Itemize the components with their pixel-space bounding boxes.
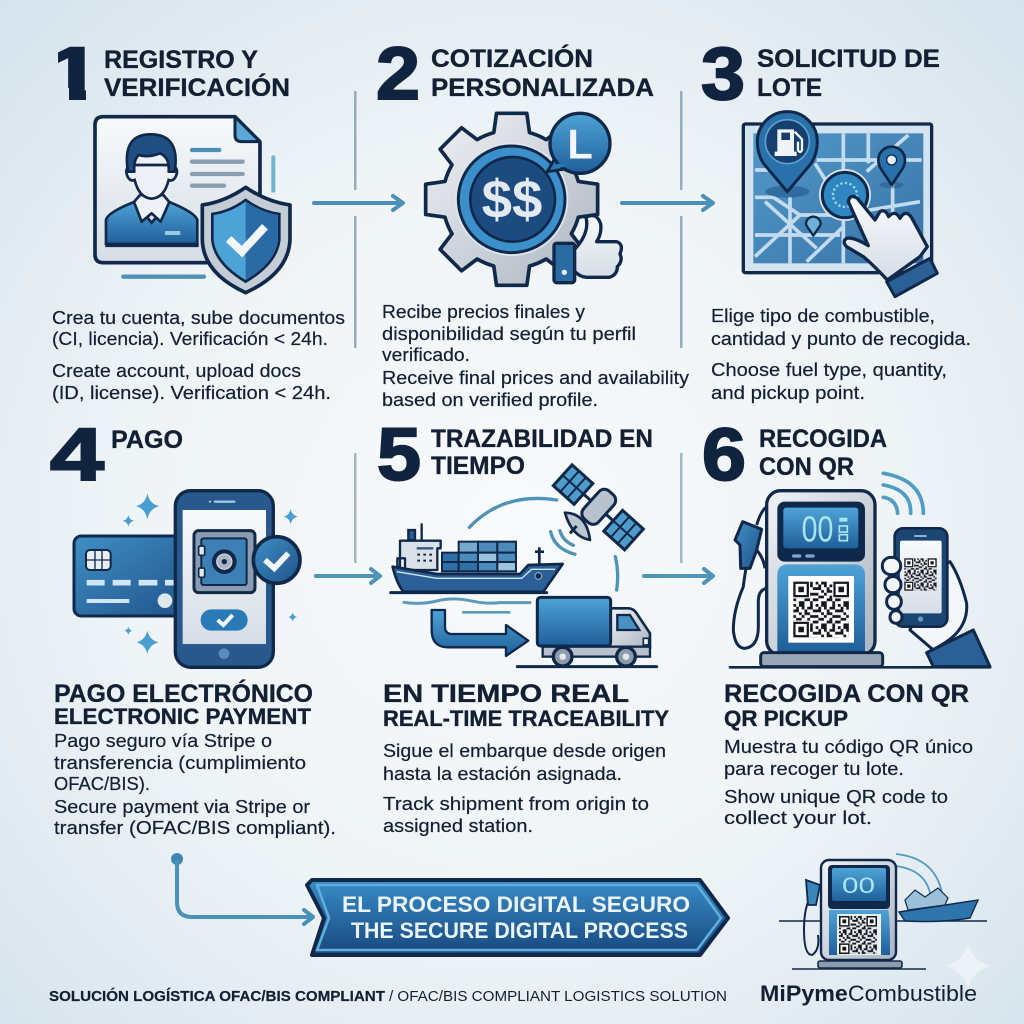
arrow: step 1 to 2 (314, 196, 403, 210)
heading: solicitud: LOTE (757, 74, 822, 102)
body text step 1: (ID, license). Verification < 24h. (52, 382, 331, 403)
body text step 6: collect your lot. (724, 807, 872, 828)
panel: step 6 (702, 413, 990, 828)
heading: en tiempo real: REAL-TIME TRACEABILITY (383, 706, 669, 731)
heading: registro: REGISTRO Y (104, 46, 258, 74)
icon: ship truck satellite (391, 461, 657, 667)
heading: trazabilidad: TIEMPO (431, 452, 525, 480)
body text step 1 (52, 307, 345, 403)
number 3: 3 (701, 32, 745, 115)
body text step 5: Track shipment from origin to (383, 793, 649, 814)
body text step 3: Choose fuel type, quantity, (711, 359, 947, 380)
heading: cotizacion: PERSONALIZADA (431, 74, 654, 102)
panel: step 4 (50, 413, 336, 838)
body text step 4: transferencia (cumplimiento (54, 752, 306, 773)
arrow: step 2 to 3 (622, 196, 713, 210)
body text step 4 (54, 730, 336, 838)
body text step 3: and pickup point. (711, 382, 865, 403)
heading: registro (104, 46, 290, 102)
body text step 2: Receive final prices and availability (382, 367, 690, 388)
icon: map with pin and hand (743, 112, 937, 297)
body text step 6: Show unique QR code to (724, 786, 948, 807)
icon: gear with dollars: $$ (482, 171, 542, 230)
heading: recogida con qr: QR PICKUP (724, 706, 848, 731)
icon: fuel pump and phone QR (730, 473, 990, 667)
body text step 4: transfer (OFAC/BIS compliant). (54, 817, 336, 838)
number 4: 4 (50, 413, 104, 496)
arrow: step 5 to 6 (644, 569, 713, 583)
banner (307, 880, 728, 955)
footer tagline (49, 987, 727, 1005)
body text step 5: Sigue el embarque desde origen (383, 740, 666, 761)
body text step 3: cantidad y punto de recogida. (711, 328, 971, 349)
body text step 2: disponibilidad según tu perfil (382, 323, 636, 344)
body text step 1: Crea tu cuenta, sube documentos (52, 307, 345, 328)
banner: EL PROCESO DIGITAL SEGURO (342, 892, 690, 917)
panel: step 2 (376, 32, 690, 410)
number 6: 6 (702, 413, 746, 496)
body text step 6 (724, 736, 973, 828)
icon: small pump and ship logo: 00 (842, 873, 875, 898)
body text step 6: para recoger tu lote. (724, 758, 904, 779)
heading: recogida (759, 425, 887, 481)
body text step 4: Secure payment via Stripe or (54, 796, 310, 817)
body text step 5: assigned station. (383, 815, 533, 836)
panel: step 3 (701, 32, 971, 403)
heading: trazabilidad (431, 425, 653, 480)
body text step 4: OFAC/BIS). (54, 773, 150, 794)
heading: recogida: RECOGIDA (759, 425, 887, 453)
connector arrow to banner (171, 853, 313, 924)
icon: gear with dollars (426, 113, 621, 285)
heading: recogida: CON QR (759, 453, 854, 481)
panel: step 5 (377, 413, 669, 836)
footer tagline: / OFAC/BIS COMPLIANT LOGISTICS SOLUTION (389, 989, 727, 1005)
number 5: 5 (377, 413, 421, 496)
heading: recogida con qr (724, 680, 969, 731)
body text step 2 (382, 301, 690, 410)
body text step 5: hasta la estación asignada. (383, 763, 622, 784)
body text step 5 (383, 740, 666, 836)
icon: small pump and ship logo (779, 854, 987, 969)
heading: pago electronico (54, 678, 313, 729)
body text step 2: based on verified profile. (382, 389, 598, 410)
body text step 1: Create account, upload docs (52, 360, 301, 381)
number 2: 2 (376, 32, 420, 115)
heading: solicitud (757, 45, 940, 102)
body text step 3 (711, 305, 971, 403)
heading: registro: VERIFICACIÓN (104, 72, 290, 102)
heading: pago electronico: ELECTRONIC PAYMENT (54, 704, 312, 729)
heading: en tiempo real (383, 680, 669, 731)
heading: trazabilidad: TRAZABILIDAD EN (431, 425, 653, 453)
body text step 2: verificado. (382, 344, 470, 365)
body text step 4: Pago seguro vía Stripe o (54, 730, 272, 751)
body text step 2: Recibe precios finales y (382, 301, 586, 322)
body text step 1: (CI, licencia). Verificación < 24h. (52, 328, 328, 349)
heading: pago electronico: PAGO ELECTRÓNICO (54, 678, 313, 708)
decorative sparkle watermark (946, 944, 990, 988)
number 1: 1 (46, 32, 102, 115)
arrow: step 4 to 5 (316, 569, 380, 583)
footer tagline: SOLUCIÓN LOGÍSTICA OFAC/BIS COMPLIANT (49, 987, 385, 1005)
body text step 3: Elige tipo de combustible, (711, 305, 935, 326)
heading: pago: PAGO (111, 426, 183, 454)
heading: en tiempo real: EN TIEMPO REAL (383, 680, 629, 708)
body text step 6: Muestra tu código QR único (724, 736, 973, 757)
heading: cotizacion (431, 43, 654, 102)
icon: id document with shield (95, 117, 290, 293)
panel: step 1 (46, 32, 345, 403)
banner: THE SECURE DIGITAL PROCESS (351, 918, 688, 943)
brand name: MiPymeCombustible (760, 981, 977, 1006)
icon: card and phone with safe (74, 491, 300, 667)
heading: solicitud: SOLICITUD DE (757, 45, 940, 73)
icon: fuel pump and phone QR: 00 (802, 508, 833, 549)
heading: recogida con qr: RECOGIDA CON QR (724, 680, 969, 708)
icon: gear with dollars: L (567, 120, 593, 167)
heading: cotizacion: COTIZACIÓN (431, 43, 593, 73)
